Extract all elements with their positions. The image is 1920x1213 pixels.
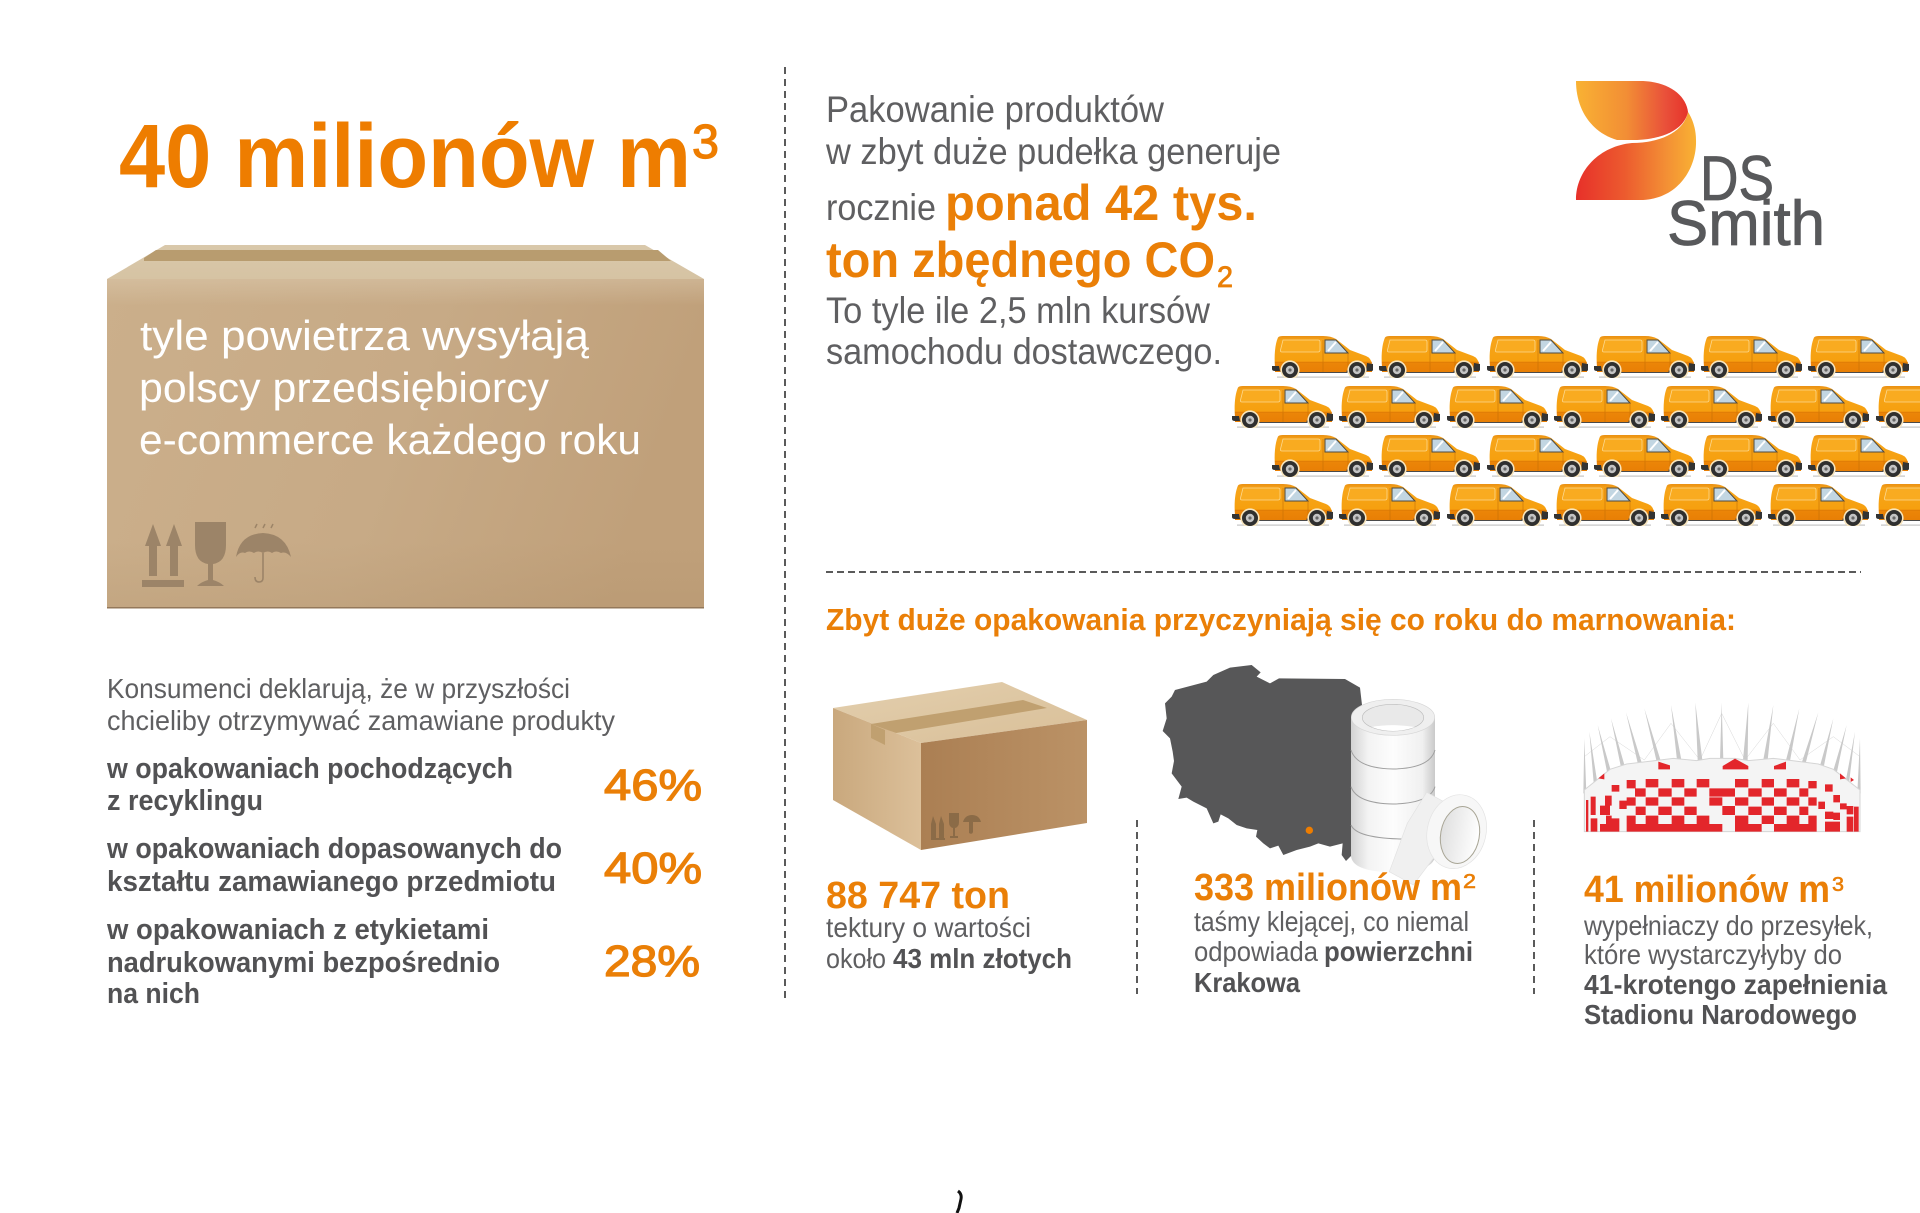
vans: row 4 bbox=[1232, 484, 1920, 528]
text block: CO2 statement: w zbyt duże pudełka generuje bbox=[825, 131, 1281, 172]
list item: printed labels 28%: nadrukowanymi bezpośrednio bbox=[107, 947, 500, 979]
text block: CO2 statement: samochodu dostawczego. bbox=[826, 331, 1222, 372]
box caption: tyle powietrza wysyłają bbox=[140, 312, 590, 359]
text block: fillers: wypełniaczy do przesyłek, bbox=[1583, 910, 1873, 941]
text block: cardboard: 88 747 ton bbox=[826, 875, 1010, 917]
text block: tape: Krakowa bbox=[1194, 967, 1300, 998]
text block: CO2 statement: 2 bbox=[1217, 261, 1233, 294]
text block: cardboard: około bbox=[826, 943, 886, 974]
list item: recycling 46% bbox=[106, 753, 702, 817]
list item: printed labels 28%: 28% bbox=[604, 937, 700, 986]
vans: row 1 bbox=[1272, 336, 1909, 380]
headline: 40 milionów m3: 40 milionów m bbox=[119, 107, 691, 207]
text block: cardboard bbox=[826, 875, 1072, 974]
list item: printed labels 28%: na nich bbox=[107, 978, 200, 1010]
icon: handling symbols bbox=[142, 522, 291, 587]
headline: 40 milionów m3: 3 bbox=[692, 116, 719, 169]
text block: CO2 statement bbox=[825, 89, 1281, 372]
icon: small cardboard box bbox=[833, 682, 1087, 850]
text block: tape: taśmy klejącej, co niemal bbox=[1194, 906, 1469, 937]
text block: tape: 333 milionów m bbox=[1194, 867, 1462, 909]
list item: printed labels 28%: w opakowaniach z etykietami bbox=[106, 914, 489, 946]
list item: recycling 46%: 46% bbox=[604, 761, 702, 810]
text block: CO2 statement: Pakowanie produktów bbox=[826, 89, 1164, 130]
text block: consumers intro bbox=[107, 673, 615, 736]
bottom mark bbox=[957, 1191, 961, 1213]
list item: fitted packaging 40%: 40% bbox=[604, 844, 702, 893]
logo: DS Smith: DS bbox=[1700, 144, 1774, 214]
text block: CO2 statement: To tyle ile 2,5 mln kursów bbox=[826, 290, 1210, 331]
list item: fitted packaging 40%: kształtu zamawianego przedmiotu bbox=[107, 866, 556, 898]
text block: fillers: Stadionu Narodowego bbox=[1584, 999, 1857, 1030]
text block: CO2 statement: ton zbędnego CO bbox=[826, 232, 1215, 288]
vans: row 3 bbox=[1272, 435, 1909, 479]
box caption: polscy przedsiębiorcy bbox=[139, 364, 549, 411]
vans: row 2 bbox=[1232, 386, 1920, 430]
text block: fillers: 41-krotengo zapełnienia bbox=[1584, 969, 1887, 1000]
text block: tape: 2 bbox=[1463, 871, 1476, 893]
text block: tape: powierzchni bbox=[1324, 936, 1473, 967]
list item: fitted packaging 40%: w opakowaniach dopasowanych do bbox=[106, 833, 562, 865]
box caption bbox=[139, 312, 641, 463]
text block: CO2 statement: rocznie bbox=[826, 187, 936, 228]
text block: fillers: które wystarczyłyby do bbox=[1584, 939, 1842, 970]
map: Poland with Kraków dot bbox=[1163, 665, 1362, 861]
text block: fillers: 3 bbox=[1832, 874, 1844, 896]
text block: consumers intro: Konsumenci deklarują, że w przyszłości bbox=[107, 673, 570, 704]
icon: tape rolls bbox=[1351, 699, 1494, 885]
list item: recycling 46%: z recyklingu bbox=[107, 785, 263, 817]
logo: DS Smith bbox=[1576, 81, 1825, 259]
panel: large cardboard box bbox=[107, 245, 704, 608]
text block: cardboard: tektury o wartości bbox=[826, 912, 1031, 943]
text block: fillers: 41 milionów m bbox=[1584, 869, 1830, 911]
icon: National Stadium bbox=[1583, 703, 1861, 832]
text block: tape bbox=[1194, 867, 1476, 998]
list item: recycling 46%: w opakowaniach pochodzących bbox=[106, 753, 513, 785]
text block: cardboard: 43 mln złotych bbox=[893, 943, 1072, 974]
text block: CO2 statement: ponad 42 tys. bbox=[945, 175, 1257, 231]
list item: fitted packaging 40% bbox=[106, 833, 702, 898]
logo: DS Smith: Smith bbox=[1667, 189, 1825, 259]
heading: waste: Zbyt duże opakowania przyczyniają się co roku do marnowania: bbox=[826, 602, 1736, 637]
text block: tape: odpowiada bbox=[1194, 936, 1318, 967]
text block: consumers intro: chcieliby otrzymywać zamawiane produkty bbox=[107, 705, 615, 736]
text block: fillers bbox=[1583, 869, 1887, 1030]
list item: printed labels 28% bbox=[106, 914, 700, 1010]
box caption: e-commerce każdego roku bbox=[139, 416, 641, 463]
